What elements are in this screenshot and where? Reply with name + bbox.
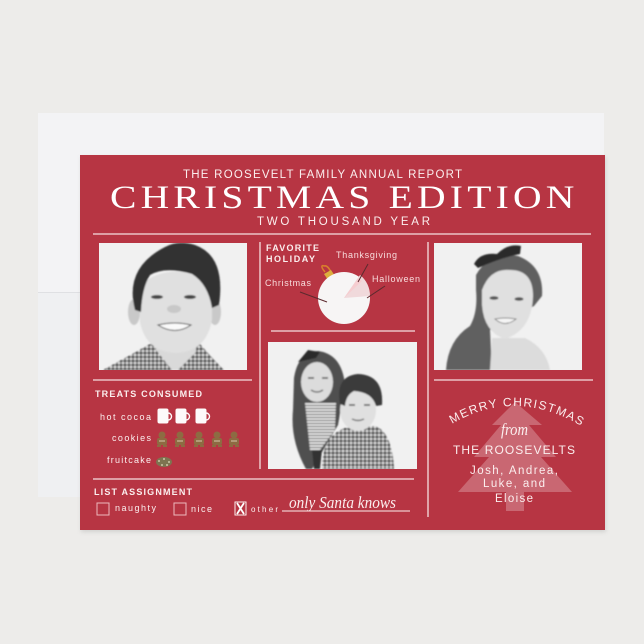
smile (158, 323, 191, 330)
panel: favorite holiday (265, 243, 420, 324)
title block (110, 169, 574, 228)
year line: TWO THOUSAND YEAR (257, 216, 430, 228)
checkbox nice (174, 503, 212, 515)
panel dividers (93, 234, 593, 517)
handwritten answer: only Santa knows (289, 493, 396, 512)
ears (128, 299, 140, 325)
panel: treats consumed: fruitcake (107, 455, 151, 465)
boy hair (339, 374, 382, 406)
panel: favorite holiday: Halloween (372, 274, 420, 284)
neck (155, 347, 198, 370)
checkbox other: other (251, 505, 278, 514)
photo: boy portrait (99, 243, 247, 370)
panel: greeting (448, 398, 584, 511)
heading: TREATS CONSUMED (95, 389, 202, 399)
icons: mugs (158, 409, 210, 423)
panel: greeting: Luke, and (483, 478, 545, 490)
card (80, 155, 605, 530)
report line: THE ROOSEVELT FAMILY ANNUAL REPORT (183, 169, 462, 181)
girl face (301, 362, 333, 402)
smile (495, 318, 516, 324)
icon: tree (458, 402, 572, 511)
shirt (103, 344, 224, 370)
from: from (501, 420, 528, 439)
eyes (151, 295, 163, 299)
envelope (38, 113, 604, 497)
panel: favorite holiday: HOLIDAY (266, 254, 315, 264)
nose (167, 305, 181, 313)
checkbox naughty (97, 503, 156, 515)
names: Josh, Andrea, (470, 465, 558, 477)
family name: THE ROOSEVELTS (453, 443, 575, 457)
panel: greeting: Eloise (495, 493, 533, 505)
checkbox naughty: naughty (115, 503, 156, 513)
boy shirt (322, 426, 394, 469)
merry christmas arc (452, 406, 578, 424)
face (139, 272, 212, 353)
panel: greeting: MERRY CHRISTMAS (448, 398, 584, 425)
bow (474, 245, 521, 268)
girl hair (293, 351, 345, 469)
girl top (305, 403, 336, 450)
faces details (308, 378, 370, 405)
shoulder (490, 338, 550, 370)
panel: favorite holiday: Christmas (265, 278, 312, 288)
heading: LIST ASSIGNMENT (94, 487, 192, 497)
girl skirt (312, 450, 322, 469)
panel: treats consumed: cookies (112, 433, 152, 443)
ornament pie chart (300, 264, 385, 324)
photo: two children (268, 342, 417, 469)
checkbox other (235, 502, 278, 515)
eyes (490, 296, 498, 300)
heading: FAVORITE (266, 243, 319, 253)
boy face (340, 389, 376, 431)
panel: treats consumed (95, 389, 239, 467)
icon: fruitcake (156, 457, 172, 467)
checkbox nice: nice (191, 504, 212, 514)
card shadow (81, 157, 606, 532)
face (482, 270, 533, 339)
photo: girl portrait (434, 243, 582, 370)
row labels: hot cocoa (100, 412, 151, 422)
long hair (446, 255, 542, 370)
panel: list assignment (94, 487, 410, 515)
labels: Thanksgiving (336, 250, 397, 260)
icons: cookies (157, 432, 239, 446)
bow (298, 350, 320, 362)
hair (133, 243, 220, 312)
main heading: CHRISTMAS EDITION (110, 179, 574, 215)
